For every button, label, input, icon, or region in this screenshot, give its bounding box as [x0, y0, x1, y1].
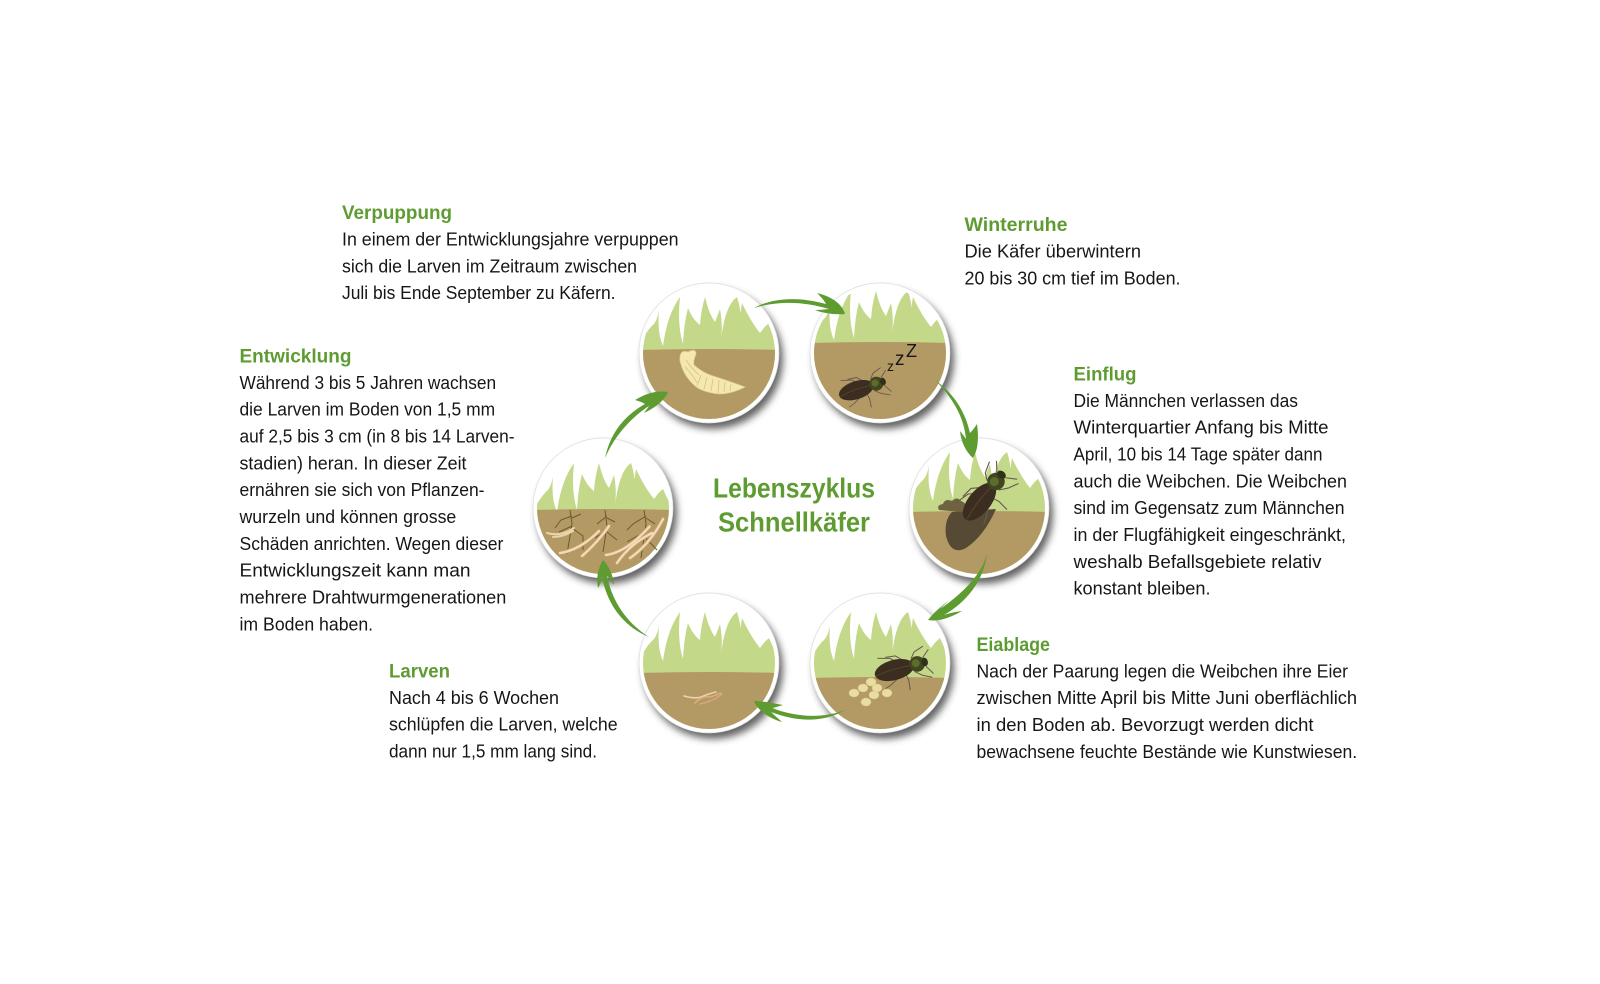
text block: Winterruhe: 20 bis 30 cm tief im Boden. — [964, 267, 1180, 288]
text block: Larven: dann nur 1,5 mm lang sind. — [389, 740, 597, 762]
icon: soil pile — [938, 498, 969, 512]
text block: Entwicklung: Entwicklungszeit kann man — [240, 560, 470, 581]
icon: roots — [555, 510, 657, 558]
text block: Eiablage: Eiablage — [976, 635, 1050, 656]
text block: Winterruhe — [964, 215, 1180, 288]
icon: zzz — [887, 341, 917, 374]
icon: pupa — [680, 350, 745, 394]
text block: Entwicklung — [239, 346, 514, 634]
text block: Eiablage: zwischen Mitte April bis Mitte Juni oberflächlich — [976, 687, 1357, 708]
text block: Verpuppung — [342, 203, 678, 303]
text block: Entwicklung: ernähren sie sich von Pflanzen- — [240, 479, 484, 500]
text block: Einflug — [1072, 364, 1347, 599]
arrow: Larven to Entwicklung — [597, 560, 649, 637]
icon: young larvae — [684, 692, 722, 704]
text block: Entwicklung: im Boden haben. — [240, 613, 373, 634]
text block: Entwicklung: mehrere Drahtwurmgenerationen — [240, 587, 506, 608]
text block: Verpuppung: Verpuppung — [342, 203, 452, 224]
text block: Einflug: sind im Gegensatz zum Männchen — [1074, 497, 1344, 518]
text block: Eiablage: Nach der Paarung legen die Weibchen ihre Eier — [976, 660, 1348, 681]
title: Lebenszyklus — [713, 472, 875, 504]
icon: zzz: Z — [906, 341, 917, 361]
title — [713, 472, 875, 538]
arrow: Eiablage to Larven — [754, 701, 845, 722]
icon: sleeping beetle — [835, 366, 895, 416]
text block: Entwicklung: Während 3 bis 5 Jahren wachsen — [240, 372, 496, 393]
text block: Entwicklung: stadien) heran. In dieser Zeit — [240, 452, 466, 473]
title: Schnellkäfer — [718, 506, 870, 538]
arrow: Entwicklung to Verpuppung — [605, 391, 668, 458]
text block: Einflug: April, 10 bis 14 Tage später dann — [1074, 444, 1322, 464]
text block: Verpuppung: Juli bis Ende September zu Käfern. — [342, 282, 616, 303]
text block: Larven: Nach 4 bis 6 Wochen — [389, 687, 559, 708]
text block: Verpuppung: sich die Larven im Zeitraum zwischen — [342, 255, 637, 276]
text block: Einflug: Einflug — [1074, 364, 1136, 386]
text block: Eiablage: bewachsene feuchte Bestände wie Kunstwiesen. — [976, 741, 1357, 762]
arrow: Einflug to Eiablage — [928, 553, 987, 621]
text block: Entwicklung: Schäden anrichten. Wegen dieser — [240, 533, 503, 554]
text block: Einflug: in der Flugfähigkeit eingeschränkt, — [1074, 524, 1346, 545]
icon: zzz: z — [887, 358, 894, 374]
text block: Winterruhe: Winterruhe — [964, 215, 1068, 236]
arrow: Verpuppung to Winterruhe — [754, 293, 845, 314]
scene: Larven circle — [637, 593, 783, 763]
icon: eggs — [849, 678, 892, 706]
text block: Larven: schlüpfen die Larven, welche — [389, 714, 618, 735]
text block: Entwicklung: wurzeln und können grosse — [239, 506, 456, 527]
arrow: Winterruhe to Einflug — [935, 380, 978, 458]
text block: Eiablage: in den Boden ab. Bevorzugt werden dicht — [976, 714, 1314, 735]
scene: Entwicklung circle — [531, 438, 677, 600]
icon: zzz: z — [895, 349, 904, 370]
text block: Entwicklung: Entwicklung — [240, 346, 352, 368]
icon: beetle laying eggs — [871, 645, 937, 698]
scene: Einflug circle — [907, 438, 1053, 602]
scene: Verpuppung circle — [637, 283, 783, 440]
text block: Einflug: konstant bleiben. — [1074, 578, 1210, 599]
text block: Einflug: weshalb Befallsgebiete relativ — [1072, 551, 1322, 572]
text block: Entwicklung: auf 2,5 bis 3 cm (in 8 bis 14 Larven- — [240, 426, 514, 446]
text block: Winterruhe: Die Käfer überwintern — [964, 240, 1141, 262]
icon: beetle entering soil — [952, 458, 1027, 536]
text block: Einflug: Die Männchen verlassen das — [1074, 390, 1298, 411]
text block: Entwicklung: die Larven im Boden von 1,5 mm — [240, 399, 495, 420]
icon: burrow — [946, 509, 996, 550]
text block: Eiablage — [976, 635, 1357, 762]
text block: Larven — [389, 662, 618, 762]
icon: wireworms — [547, 519, 663, 563]
scene: Eiablage circle — [808, 592, 960, 744]
scene: Winterruhe circle — [808, 283, 954, 433]
text block: Einflug: auch die Weibchen. Die Weibchen — [1074, 470, 1347, 491]
text block: Einflug: Winterquartier Anfang bis Mitte — [1074, 417, 1328, 438]
text block: Verpuppung: In einem der Entwicklungsjahre verpuppen — [342, 228, 678, 250]
text block: Larven: Larven — [389, 662, 450, 682]
